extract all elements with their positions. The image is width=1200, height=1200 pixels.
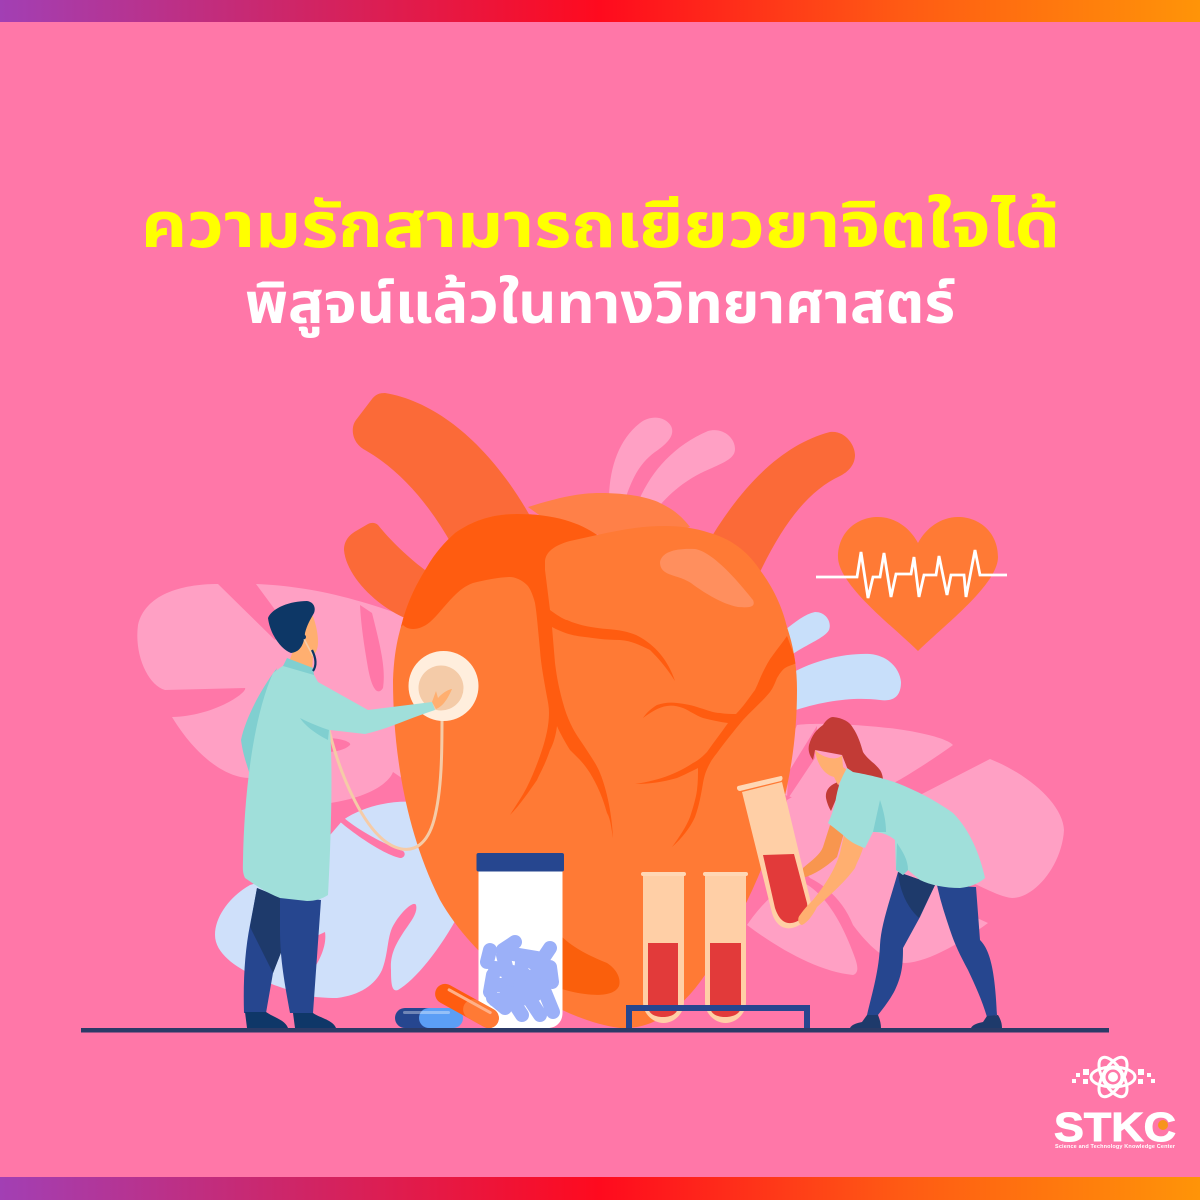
title: ความรักสามารถเยียวยาจิตใจได้: [141, 191, 1060, 261]
logo: STKC: [1054, 1053, 1176, 1150]
pill jar: [476, 853, 564, 1028]
test tube 1: [641, 872, 686, 1023]
doctor hand: [432, 689, 452, 709]
tilted test tube: [737, 776, 811, 928]
woman front arm: [798, 835, 863, 925]
woman: [798, 717, 1002, 1028]
woman leg shade: [898, 872, 935, 918]
test tube rack and tubes: [629, 872, 807, 1028]
doctor neck and face: [289, 612, 318, 672]
doctor coat shade: [241, 668, 277, 775]
woman back leg: [937, 885, 997, 1017]
woman back arm: [803, 825, 844, 878]
leaf: right wedge cut: [787, 726, 817, 800]
icon: heart with ECG pulse: [816, 517, 1007, 651]
doctor back leg: [244, 888, 282, 1013]
doctor shoes: [245, 1012, 336, 1028]
logo tagline: Science and Technology Knowledge Center: [1055, 1144, 1176, 1150]
doctor sleeve shade: [300, 718, 329, 740]
capsule: orange: [432, 980, 502, 1032]
jar lid: [476, 853, 564, 872]
leaf: right pink large: [920, 759, 1064, 898]
leaf: left blue cuts: [308, 817, 405, 970]
top gradient bar: [0, 0, 1200, 22]
artery: right: [705, 432, 855, 572]
leaf: large left pink: [137, 584, 420, 803]
heart back dome: [528, 493, 690, 540]
woman face: [815, 750, 847, 785]
test tube 2: [703, 872, 748, 1023]
woman hair: [809, 717, 883, 781]
woman hair lock: [826, 782, 840, 811]
logo orange dot: [1158, 1120, 1168, 1130]
heart bottom shade: [555, 935, 620, 995]
bottom gradient bar: [0, 1177, 1200, 1200]
doctor earpiece: [301, 634, 316, 671]
leaf: right pink middle: [785, 770, 988, 963]
leaf: right pink lower: [747, 883, 857, 975]
capsule: blue: [395, 1008, 463, 1028]
logo wordmark: STKC: [1054, 1104, 1176, 1150]
woman shirt shade: [873, 800, 908, 875]
jar pills: [487, 942, 553, 1015]
heart dark cap and main vessel: [385, 500, 675, 838]
leaf: right blue fingers: [785, 612, 901, 712]
heart illustration: [344, 393, 855, 1028]
title: พิสูจน์แล้วในทางวิทยาศาสตร์: [245, 272, 955, 338]
leaf: left pink cuts: [327, 605, 384, 752]
stethoscope tube: [329, 718, 442, 849]
heart body: [393, 514, 797, 1028]
doctor: [241, 601, 452, 1028]
leaf: right pink upper: [770, 724, 953, 810]
doctor hair: [268, 601, 315, 653]
logo atom icon: [1091, 1053, 1135, 1101]
leaf: left blue: [215, 802, 460, 998]
background leaves: [137, 418, 1064, 998]
leaf: top pink fingers: [609, 418, 735, 510]
doctor coat: [243, 665, 435, 901]
jar body: [478, 871, 562, 1028]
heart highlight: [660, 549, 754, 607]
doctor collar: [283, 658, 314, 675]
woman front leg: [867, 872, 935, 1015]
ground line: [81, 1028, 1109, 1032]
stethoscope chest piece: [408, 651, 478, 721]
doctor back leg shade: [250, 888, 282, 973]
woman shoes: [850, 1015, 1002, 1028]
heart right vessel: [635, 636, 797, 847]
doctor front leg: [280, 896, 321, 1013]
artery: left small: [344, 523, 432, 618]
title: [141, 191, 1060, 338]
logo dots: [1072, 1069, 1155, 1084]
woman shirt: [828, 768, 985, 888]
artery: left big: [353, 393, 535, 545]
rack: [629, 1008, 807, 1028]
